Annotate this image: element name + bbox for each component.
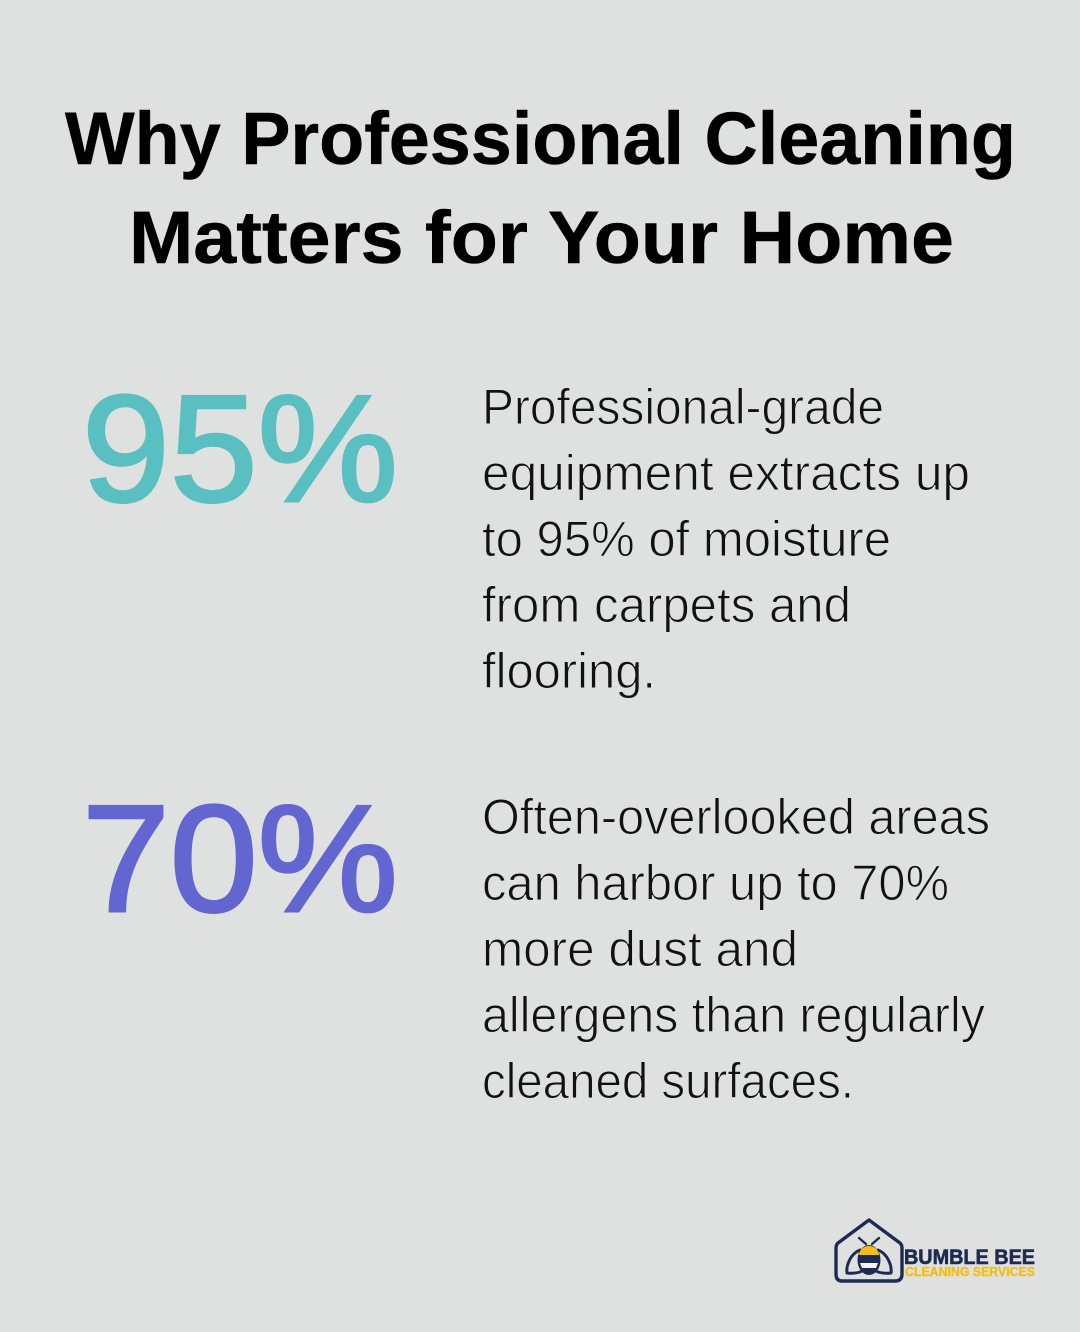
text block: overlooked areas xyxy=(482,789,990,1109)
text block: overlooked areas: allergens than regularly xyxy=(482,987,985,1043)
text block: moisture extraction: equipment extracts up xyxy=(482,445,970,501)
text block: moisture extraction: Professional-grade xyxy=(482,379,884,435)
stat: 95%: 95% xyxy=(82,364,398,534)
logo tagline: CLEANING SERVICES xyxy=(905,1265,1035,1279)
title xyxy=(65,97,1016,279)
text block: moisture extraction: from carpets and xyxy=(482,577,851,633)
logo: Bumble Bee Cleaning Services xyxy=(836,1220,1035,1281)
text block: overlooked areas: cleaned surfaces. xyxy=(482,1053,854,1109)
text block: moisture extraction xyxy=(482,379,970,699)
stat: 70%: 70% xyxy=(82,774,398,944)
text block: overlooked areas: more dust and xyxy=(482,921,798,977)
icon: house outline with bee xyxy=(836,1220,902,1281)
text block: moisture extraction: flooring. xyxy=(482,643,656,699)
title: Why Professional Cleaning xyxy=(65,97,1016,180)
text block: overlooked areas: Often-overlooked areas xyxy=(482,789,990,845)
text block: moisture extraction: to 95% of moisture xyxy=(482,511,891,567)
text block: overlooked areas: can harbor up to 70% xyxy=(482,855,949,911)
title: Matters for Your Home xyxy=(129,196,954,279)
logo wordmark: BUMBLE BEE xyxy=(904,1246,1035,1269)
